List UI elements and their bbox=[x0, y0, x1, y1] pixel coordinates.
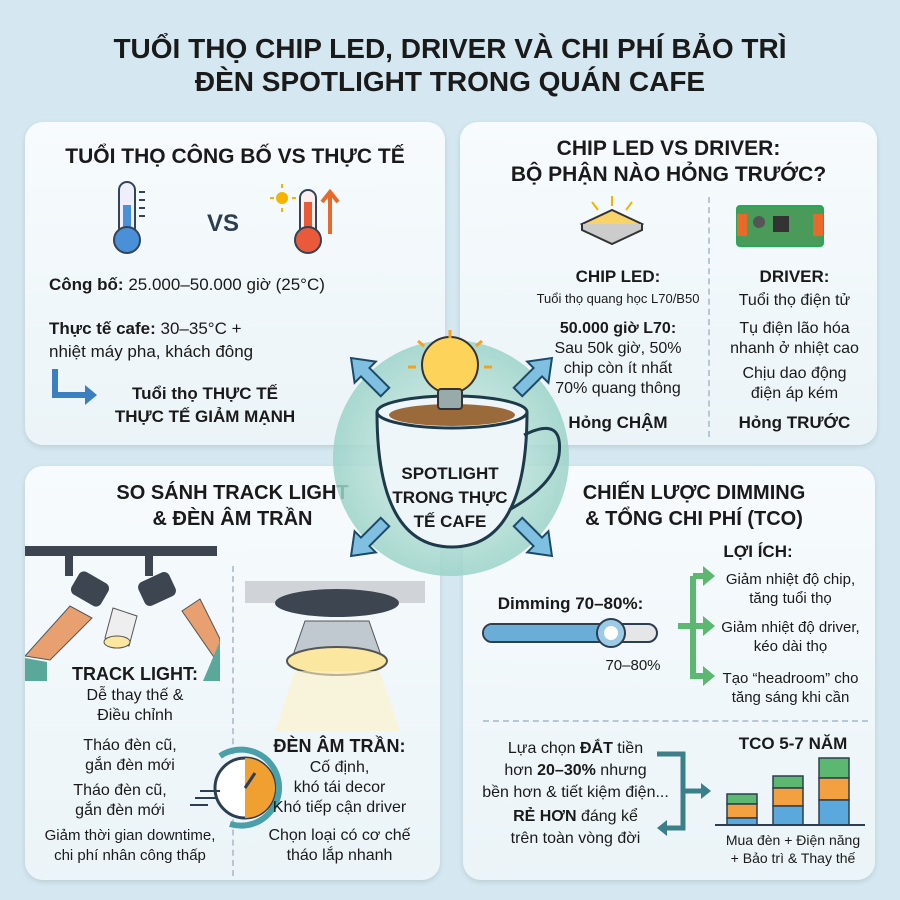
text: choose expensive: Lựa chọn ĐẮT tiền bbox=[508, 740, 643, 757]
chart: tco bbox=[715, 734, 865, 866]
text: hub label: TRONG THỰC bbox=[392, 488, 508, 507]
column: chip led: 70% quang thông bbox=[555, 380, 681, 397]
text: thuc te: nhiệt máy pha, khách đông bbox=[49, 342, 253, 361]
icon: driver board bbox=[736, 205, 824, 247]
column: chip led: CHIP LED: bbox=[576, 267, 660, 286]
icon: led chip bbox=[580, 196, 644, 246]
text: downtime: chi phí nhân công thấp bbox=[54, 847, 206, 864]
panel: track light vs am tran: Tháo đèn cũ, bbox=[73, 782, 167, 799]
column: driver bbox=[730, 267, 859, 432]
column: chip led: 50.000 giờ L70: bbox=[560, 320, 676, 337]
arrows bbox=[657, 752, 711, 836]
column: chip led: Hỏng CHẬM bbox=[568, 413, 668, 432]
panel: track light vs am tran: Chọn loại có cơ chế bbox=[268, 827, 411, 844]
text: result: Tuổi thọ THỰC TẾ bbox=[132, 384, 278, 403]
panel: dimming & tco: Giảm nhiệt độ driver, bbox=[721, 619, 860, 636]
panel: dimming & tco: 70–80% bbox=[605, 657, 661, 674]
text: track light: Điều chỉnh bbox=[97, 707, 173, 724]
column: chip led: chip còn ít nhất bbox=[564, 360, 672, 377]
panel: tuoi tho cong bo vs thuc te bbox=[25, 122, 445, 445]
icon: arrow bbox=[52, 369, 97, 405]
panel: track light vs am tran: Tháo đèn cũ, bbox=[83, 737, 177, 754]
text: result: THỰC TẾ GIẢM MẠNH bbox=[115, 407, 295, 426]
text: dimming label: Dimming 70–80%: bbox=[498, 594, 643, 613]
slider bbox=[482, 618, 658, 648]
text: choose expensive: hơn 20–30% nhưng bbox=[504, 762, 647, 779]
benefits: tăng tuổi thọ bbox=[749, 590, 832, 607]
text: track light: TRACK LIGHT: bbox=[72, 664, 198, 684]
chart: tco: Mua đèn + Điện năng bbox=[726, 832, 860, 848]
title: ĐÈN SPOTLIGHT TRONG QUÁN CAFE bbox=[195, 66, 705, 97]
divider bbox=[708, 197, 710, 437]
vs: VS bbox=[207, 210, 239, 237]
text: hub label: TẾ CAFE bbox=[414, 512, 486, 531]
column: chip led: Sau 50k giờ, 50% bbox=[554, 340, 682, 357]
heading: & TỔNG CHI PHÍ (TCO) bbox=[585, 508, 803, 530]
text: choose expensive: bền hơn & tiết kiệm điện... bbox=[482, 784, 669, 801]
title: TUỔI THỌ CHIP LED, DRIVER VÀ CHI PHÍ BẢO TRÌ bbox=[113, 33, 787, 64]
panel: dimming & tco: Tạo “headroom” cho bbox=[723, 670, 858, 687]
heading bbox=[116, 481, 349, 530]
text: thuc te bbox=[49, 319, 253, 361]
column: driver: nhanh ở nhiệt cao bbox=[730, 340, 859, 357]
benefits: Giảm nhiệt độ chip, bbox=[726, 571, 855, 588]
heading: BỘ PHẬN NÀO HỎNG TRƯỚC? bbox=[511, 163, 826, 186]
column: driver: Tuổi thọ điện tử bbox=[739, 292, 850, 309]
chart: tco: + Bảo trì & Thay thế bbox=[731, 850, 855, 866]
heading bbox=[583, 480, 805, 530]
text: track light: Dễ thay thế & bbox=[87, 687, 183, 704]
heading: CHIP LED VS DRIVER: bbox=[557, 137, 780, 160]
text: track light bbox=[72, 664, 198, 724]
panel: chip led vs driver bbox=[460, 122, 877, 445]
panel: track light vs am tran: gắn đèn mới bbox=[85, 757, 175, 774]
column: chip led bbox=[536, 267, 699, 432]
panel: dimming & tco: tăng sáng khi cần bbox=[732, 689, 849, 706]
icon: stopwatch bbox=[190, 746, 282, 829]
text: result bbox=[115, 384, 295, 426]
text: loi ich: LỢI ÍCH: bbox=[723, 542, 793, 561]
center hub: spotlight cup bbox=[333, 330, 569, 576]
panel: dimming & tco bbox=[463, 466, 875, 880]
column: driver: DRIVER: bbox=[760, 267, 829, 286]
column: driver: Chịu dao động bbox=[742, 365, 847, 382]
panel: track light vs am tran: gắn đèn mới bbox=[75, 802, 165, 819]
icon: cool thermometer bbox=[113, 181, 145, 254]
text: choose expensive bbox=[482, 738, 669, 801]
text: hub label: SPOTLIGHT bbox=[401, 464, 499, 483]
text: thuc te: Thực tế cafe: 30–35°C + bbox=[49, 319, 242, 338]
heading: & ĐÈN ÂM TRẦN bbox=[152, 508, 312, 530]
panel: track light vs am tran: tháo lắp nhanh bbox=[287, 847, 392, 864]
text: den am tran bbox=[273, 735, 406, 816]
text: den am tran: ĐÈN ÂM TRẦN: bbox=[274, 736, 406, 756]
text: cong bo: Công bố: 25.000–50.000 giờ (25°C) bbox=[49, 275, 325, 294]
icon: recessed light bbox=[245, 581, 425, 731]
heading: TUỔI THỌ CÔNG BỐ VS THỰC TẾ bbox=[65, 145, 405, 168]
panel: dimming & tco: kéo dài thọ bbox=[754, 638, 827, 655]
text: downtime bbox=[45, 827, 215, 864]
heading bbox=[511, 137, 826, 186]
text: den am tran: khó tái decor bbox=[294, 779, 385, 796]
panel: track light vs am tran bbox=[25, 466, 440, 880]
chart: tco: TCO 5-7 NĂM bbox=[739, 734, 847, 753]
icon: hot thermometer bbox=[270, 184, 340, 254]
column: driver: điện áp kém bbox=[751, 385, 838, 402]
title bbox=[113, 33, 787, 97]
icon: track lights with hands bbox=[25, 546, 220, 681]
text: downtime: Giảm thời gian downtime, bbox=[45, 827, 215, 844]
column: driver: Hỏng TRƯỚC bbox=[739, 413, 850, 432]
text: den am tran: Cố định, bbox=[310, 759, 369, 776]
panel: dimming & tco: RẺ HƠN đáng kể bbox=[513, 808, 638, 825]
divider bbox=[232, 566, 234, 876]
text: hub label bbox=[392, 464, 508, 531]
column: driver: Tụ điện lão hóa bbox=[739, 320, 850, 337]
brace arrows bbox=[678, 566, 715, 686]
heading: SO SÁNH TRACK LIGHT bbox=[116, 482, 349, 504]
heading: CHIẾN LƯỢC DIMMING bbox=[583, 482, 805, 504]
panel: dimming & tco: trên toàn vòng đời bbox=[511, 830, 640, 847]
column: chip led: Tuổi thọ quang học L70/B50 bbox=[537, 291, 699, 306]
text: den am tran: Khó tiếp cận driver bbox=[273, 799, 406, 816]
benefits bbox=[726, 571, 855, 607]
